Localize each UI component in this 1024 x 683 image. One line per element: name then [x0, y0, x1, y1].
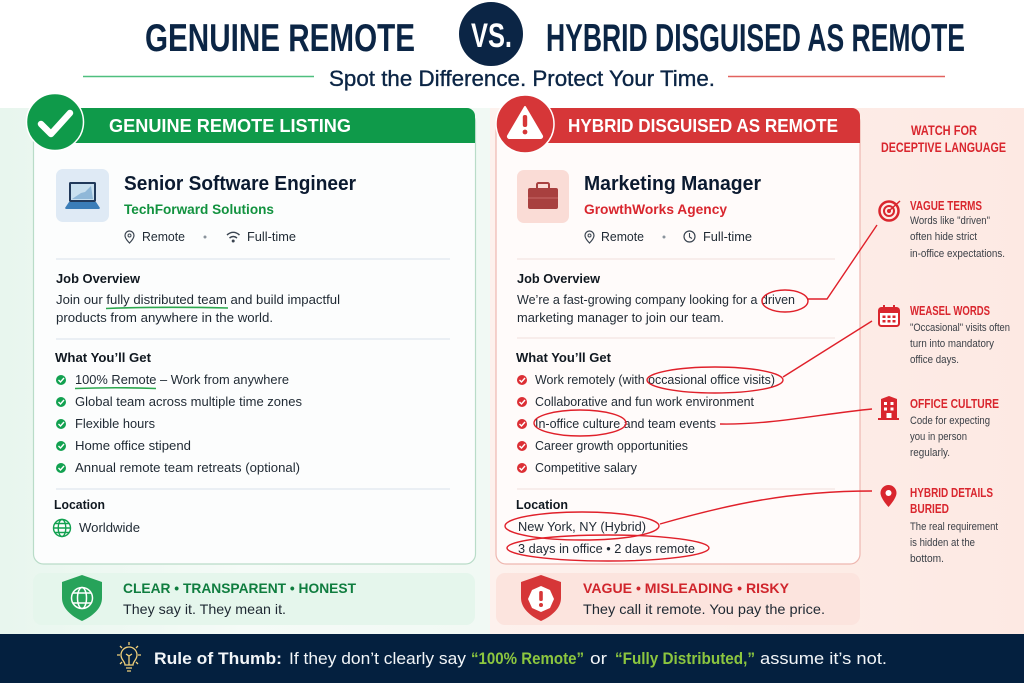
what you'll get list: What You’ll Get — [55, 350, 152, 365]
item: hybrid details buried: is hidden at the — [910, 537, 975, 549]
item: vague terms: in-office expectations. — [910, 248, 1005, 260]
rule text — [154, 649, 887, 668]
item: hybrid details buried: HYBRID DETAILS — [910, 485, 993, 500]
item: office culture: Code for expecting — [910, 415, 990, 427]
banner heading: GENUINE REMOTE LISTING — [109, 116, 351, 136]
icon: target — [880, 201, 900, 220]
what you'll get list: Competitive salary — [535, 460, 637, 475]
subtitle: Spot the Difference. Protect Your Time. — [329, 66, 715, 91]
item: office culture — [878, 396, 999, 459]
panel: vague misleading risky strip — [496, 573, 860, 625]
panel: clear transparent honest strip — [33, 573, 475, 625]
item: weasel words: "Occasional" visits often — [910, 322, 1010, 334]
icon: briefcase — [517, 170, 569, 223]
vs badge — [459, 2, 523, 66]
meta row: Full-time — [703, 229, 752, 244]
job overview: We’re a fast-growing company looking for a driven — [517, 292, 795, 307]
job overview — [517, 271, 795, 325]
banner heading: HYBRID DISGUISED AS REMOTE — [568, 116, 838, 136]
icon: map pin — [880, 485, 896, 507]
panel: green backdrop — [0, 108, 490, 634]
item: office culture: regularly. — [910, 447, 950, 459]
rule text: Rule of Thumb: — [154, 649, 282, 668]
item: hybrid details buried — [880, 485, 998, 565]
location — [54, 497, 140, 536]
item: weasel words: turn into mandatory — [910, 338, 994, 350]
icon: calendar — [879, 305, 899, 326]
job title: Marketing Manager — [584, 173, 761, 195]
item: hybrid details buried: bottom. — [910, 553, 944, 565]
item: weasel words — [879, 303, 1010, 366]
red header banner — [525, 108, 860, 143]
rule text: “100% Remote” — [471, 649, 584, 668]
vs badge: VS. — [471, 17, 512, 55]
rule text: If they don’t clearly say — [289, 649, 467, 668]
tagline: VAGUE • MISLEADING • RISKY — [583, 580, 790, 596]
what you'll get list: Global team across multiple time zones — [75, 394, 302, 409]
what you'll get list: Career growth opportunities — [535, 438, 688, 453]
item: office culture: OFFICE CULTURE — [910, 396, 999, 411]
icon: globe shield — [62, 575, 102, 621]
icon: building — [878, 396, 899, 420]
icon: laptop — [56, 169, 109, 222]
panel: hybrid disguised as remote listing — [496, 95, 860, 564]
card body — [34, 112, 476, 564]
icon: warning badge — [496, 95, 554, 153]
rule text: or — [590, 649, 607, 668]
meta row: Remote — [601, 229, 644, 244]
item: vague terms: Words like "driven" — [910, 215, 990, 227]
meta row — [125, 229, 296, 244]
location — [516, 497, 695, 556]
item: vague terms — [880, 198, 1005, 260]
job overview: products from anywhere in the world. — [56, 310, 273, 325]
rule text: assume it’s not. — [760, 649, 887, 668]
what you'll get list: In-office culture and team events — [535, 416, 716, 431]
location: Location — [516, 497, 568, 512]
location: New York, NY (Hybrid) — [518, 519, 646, 534]
location: Worldwide — [79, 520, 140, 535]
what you'll get list: Collaborative and fun work environment — [535, 394, 754, 409]
item: office culture: you in person — [910, 431, 967, 443]
tagline: CLEAR • TRANSPARENT • HONEST — [123, 580, 356, 596]
item: vague terms: VAGUE TERMS — [910, 198, 982, 213]
company name: TechForward Solutions — [124, 201, 274, 217]
what you'll get list: Flexible hours — [75, 416, 155, 431]
what you'll get list: Work remotely (with occasional office visits) — [535, 372, 775, 387]
job overview — [56, 271, 340, 325]
title — [145, 2, 965, 66]
slogan: They call it remote. You pay the price. — [583, 601, 825, 617]
item: hybrid details buried: BURIED — [910, 501, 949, 516]
company name: GrowthWorks Agency — [584, 201, 727, 217]
icon: alert shield — [521, 575, 561, 621]
job title: Senior Software Engineer — [124, 173, 356, 195]
panel: red backdrop — [490, 108, 1024, 634]
what you'll get list: Home office stipend — [75, 438, 191, 453]
item: weasel words: WEASEL WORDS — [910, 303, 990, 318]
meta row: Remote — [142, 229, 185, 244]
sidebar heading — [881, 122, 1006, 155]
what you'll get list: What You’ll Get — [516, 350, 612, 365]
item: hybrid details buried: The real requirement — [910, 521, 998, 533]
item: vague terms: often hide strict — [910, 231, 977, 243]
icon: light bulb — [117, 642, 141, 671]
job overview: Job Overview — [517, 271, 601, 286]
title: genuine remote: GENUINE REMOTE — [145, 17, 415, 60]
job overview: marketing manager to join our team. — [517, 310, 724, 325]
icon: check badge — [26, 94, 84, 150]
item: weasel words: office days. — [910, 354, 959, 366]
location: 3 days in office • 2 days remote — [518, 541, 695, 556]
meta row — [585, 229, 752, 244]
rule text: “Fully Distributed,” — [615, 649, 755, 668]
sidebar heading: WATCH FOR — [911, 122, 977, 138]
footer: rule of thumb — [0, 634, 1024, 683]
panel: watch for deceptive language — [878, 122, 1010, 565]
callouts: circled phrases and leader lines — [505, 225, 877, 561]
slogan: They say it. They mean it. — [123, 601, 286, 617]
location: Location — [54, 497, 105, 512]
green header banner — [60, 108, 475, 143]
meta row: Full-time — [247, 229, 296, 244]
what you'll get list — [516, 350, 775, 475]
what you'll get list: Annual remote team retreats (optional) — [75, 460, 300, 475]
job overview: Join our fully distributed team and build impactful — [56, 292, 340, 307]
job overview: Job Overview — [56, 271, 141, 286]
what you'll get list: 100% Remote – Work from anywhere — [75, 372, 289, 387]
card body — [496, 112, 860, 564]
what you'll get list — [55, 350, 302, 475]
panel: genuine remote listing — [26, 94, 476, 564]
